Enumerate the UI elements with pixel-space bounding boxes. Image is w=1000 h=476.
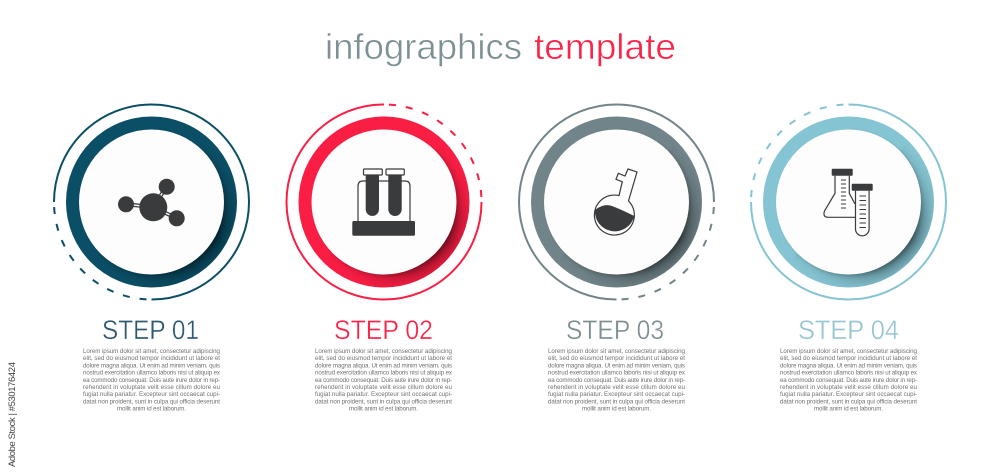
text block: step 02: datat non proident, sunt in culpa qui officia deserunt (315, 398, 452, 405)
text block: step 01: elit, sed do eiusmod tempor incididunt ut labore et (83, 355, 220, 362)
ring: step 03 circle (516, 102, 716, 302)
heading: step 02: STEP 02 (334, 315, 433, 345)
text block: step 01 (83, 348, 221, 413)
panel: step 03 (516, 102, 716, 413)
text block: step 04 (780, 348, 918, 413)
title (325, 26, 676, 67)
heading: step 03: STEP 03 (566, 315, 664, 345)
panel: step 02 (284, 102, 484, 413)
text block: step 02: dolore magna aliqua. Ut enim ad minim veniam, quis (315, 362, 452, 369)
text block: step 02: rehenderit in voluptate velit esse cillum dolore eu (315, 384, 453, 391)
text block: step 03 (548, 348, 686, 413)
text block: step 04: ea commodo consequat. Duis aute irure dolor in rep- (780, 377, 917, 384)
text block: step 04: fugiat nulla pariatur. Excepteur sint occaecat cupi- (780, 391, 917, 398)
text block: step 01: ea commodo consequat. Duis aute irure dolor in rep- (83, 377, 220, 384)
text block: step 03: elit, sed do eiusmod tempor incididunt ut labore et (548, 355, 685, 362)
text block: step 03: fugiat nulla pariatur. Excepteur sint occaecat cupi- (548, 391, 685, 398)
ring: step 02 circle (284, 102, 484, 302)
title: infographics (325, 26, 522, 67)
text block: step 04: datat non proident, sunt in culpa qui officia deserunt (780, 398, 917, 405)
text block: step 03: nostrud exercitation ullamco laboris nisi ut aliquip ex (548, 370, 686, 377)
text block: step 01: datat non proident, sunt in culpa qui officia deserunt (83, 398, 220, 405)
ring: step 04 circle (748, 102, 948, 302)
heading: step 04: STEP 04 (798, 315, 899, 345)
text block: step 02: mollit anim id est laborum. (349, 406, 418, 413)
icon: flask and test tube (824, 169, 873, 236)
text block: step 04: mollit anim id est laborum. (814, 406, 883, 413)
text block: step 03: rehenderit in voluptate velit esse cillum dolore eu (548, 384, 686, 391)
credit: vertical stock id: Adobe Stock | #530176424 (7, 362, 18, 467)
text block: step 02: Lorem ipsum dolor sit amet, consectetur adipiscing (315, 348, 453, 355)
text block: step 01: fugiat nulla pariatur. Excepteur sint occaecat cupi- (83, 391, 220, 398)
text block: step 04: rehenderit in voluptate velit esse cillum dolore eu (780, 384, 918, 391)
icon: round flask (594, 169, 637, 235)
text block: step 02: fugiat nulla pariatur. Excepteur sint occaecat cupi- (315, 391, 452, 398)
text block: step 04: nostrud exercitation ullamco laboris nisi ut aliquip ex (780, 370, 918, 377)
text block: step 01: nostrud exercitation ullamco laboris nisi ut aliquip ex (83, 370, 221, 377)
text block: step 04: elit, sed do eiusmod tempor incididunt ut labore et (780, 355, 917, 362)
ring: step 01 circle (52, 102, 252, 302)
text block: step 03: dolore magna aliqua. Ut enim ad minim veniam, quis (548, 362, 685, 369)
title: template (534, 26, 676, 67)
text block: step 01: rehenderit in voluptate velit esse cillum dolore eu (83, 384, 221, 391)
text block: step 03: ea commodo consequat. Duis aute irure dolor in rep- (548, 377, 685, 384)
text block: step 03: datat non proident, sunt in culpa qui officia deserunt (548, 398, 685, 405)
text block: step 04: Lorem ipsum dolor sit amet, consectetur adipiscing (780, 348, 918, 355)
panel: step 01 (52, 102, 252, 413)
text block: step 01: dolore magna aliqua. Ut enim ad minim veniam, quis (83, 362, 220, 369)
text block: step 02: ea commodo consequat. Duis aute irure dolor in rep- (315, 377, 452, 384)
text block: step 03: mollit anim id est laborum. (582, 406, 651, 413)
heading: step 01: STEP 01 (102, 315, 199, 345)
text block: step 02: nostrud exercitation ullamco laboris nisi ut aliquip ex (315, 370, 453, 377)
text block: step 01: mollit anim id est laborum. (117, 406, 186, 413)
text block: step 03: Lorem ipsum dolor sit amet, consectetur adipiscing (548, 348, 686, 355)
icon: test tubes in rack (352, 169, 415, 236)
text block: step 01: Lorem ipsum dolor sit amet, consectetur adipiscing (83, 348, 221, 355)
text block: step 02: elit, sed do eiusmod tempor incididunt ut labore et (315, 355, 452, 362)
text block: step 02 (315, 348, 453, 413)
icon: molecule (118, 179, 185, 226)
text block: step 04: dolore magna aliqua. Ut enim ad minim veniam, quis (780, 362, 917, 369)
panel: step 04 (748, 102, 948, 413)
